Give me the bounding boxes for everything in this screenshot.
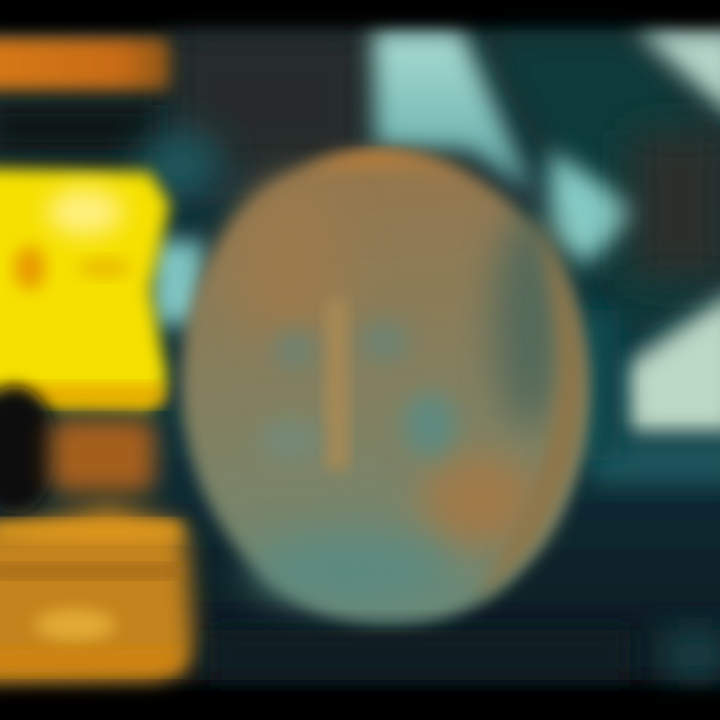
coin upper left warm tone xyxy=(230,180,350,340)
coin rim highlight top xyxy=(300,154,470,180)
coin lower right warm tone xyxy=(420,450,540,550)
yellow glowing block xyxy=(0,168,170,410)
coin right rim xyxy=(475,220,582,600)
teal light panels behind the coin xyxy=(138,30,720,680)
small orange stack xyxy=(50,418,155,493)
coin emblem cool spots xyxy=(260,322,456,460)
orange bar top left xyxy=(0,38,170,90)
coin centre vertical emblem xyxy=(326,300,348,470)
coin bottom teal tone xyxy=(250,535,450,605)
dark silhouette xyxy=(0,386,57,514)
gold coin stack lower left xyxy=(0,505,195,685)
large coin xyxy=(161,131,609,645)
dark table shadow xyxy=(210,630,630,680)
coin right cool tone xyxy=(494,210,566,430)
